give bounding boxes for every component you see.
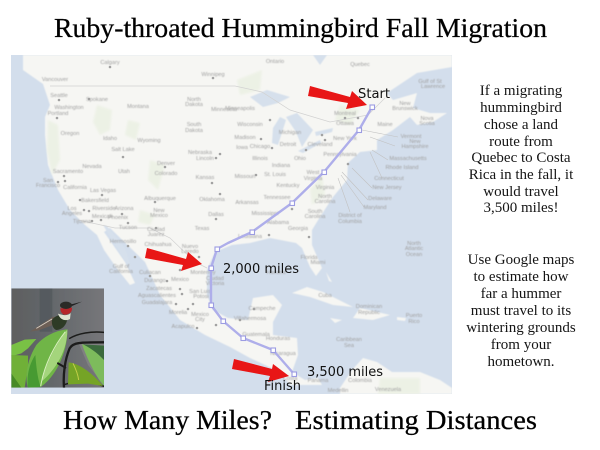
map: route waypoints: [209, 105, 374, 376]
map: place labels: New York: [333, 136, 357, 142]
branches: [58, 332, 104, 388]
arrow: pointing to 2,000 mile point: [145, 248, 202, 271]
footer heading: Estimating Distances: [295, 404, 537, 435]
map: place labels: Gulf of St: [418, 79, 442, 85]
map: place labels: Vancouver: [42, 77, 68, 83]
map: place labels: Ottawa: [336, 121, 355, 127]
map: place labels: Cleveland: [308, 142, 332, 148]
map: place labels: Georgia: [288, 226, 309, 232]
map: place labels: Miami: [311, 260, 325, 266]
map: place labels: Angeles: [62, 211, 82, 217]
map: place labels: Columbia: [338, 219, 363, 225]
map: place labels: Indiana: [272, 163, 291, 169]
map: place labels: Montana: [127, 104, 150, 110]
arrow: pointing to Finish: [232, 359, 289, 382]
map: place labels: Dallas: [208, 212, 224, 218]
map: place labels: Chihuahua: [144, 242, 172, 248]
map: place labels: District of: [338, 213, 362, 219]
map: place labels: Dakota: [185, 102, 204, 108]
map: place labels: Carolina: [315, 199, 336, 205]
text block: Google maps activity: to estimate how: [474, 269, 569, 285]
photo: ruby-throated hummingbird on leaves: [11, 288, 104, 388]
map: place labels: Spokane: [86, 97, 108, 103]
map: borders: [50, 86, 385, 268]
map: place labels: Utah: [118, 169, 130, 175]
map: place labels: Colombia: [348, 378, 373, 384]
map: place labels: Detroit: [280, 142, 297, 148]
map: place labels: Kansas: [196, 175, 215, 181]
map: place labels: Virginia: [304, 176, 323, 182]
map: place labels: Winnipeg: [201, 72, 225, 78]
text block: Google maps activity: must travel to its: [471, 303, 571, 319]
map: place labels: North: [187, 97, 201, 103]
text block: Google maps activity: [466, 252, 576, 370]
map: place labels: Aguascalientes: [138, 293, 176, 299]
map: place labels: Nicaragua: [270, 351, 297, 357]
map: place labels: Oklahoma: [199, 197, 226, 203]
map: place labels: St. Louis: [264, 172, 286, 178]
label: 2,000 miles: 2,000 miles: [223, 262, 299, 277]
map: place labels: Massachusetts: [389, 156, 427, 162]
label: Finish: Finish: [264, 379, 301, 394]
map: place labels: Los: [67, 206, 77, 212]
map: place labels: Nebraska: [188, 150, 213, 156]
map: place labels: Nevada: [82, 164, 103, 170]
map: place labels: Mexicali: [92, 214, 112, 220]
map: place labels: Tennessee: [263, 195, 291, 201]
map: place labels: Chicago: [250, 144, 270, 150]
map: place labels: Mexico: [171, 277, 189, 283]
map: place labels: Albuquerque: [144, 196, 176, 202]
map: place labels: New Jersey: [372, 185, 402, 191]
text block: land route fact: Rica in the fall, it: [469, 167, 574, 183]
map: place labels: Campeche: [248, 306, 276, 312]
map: place labels: Illinois: [252, 156, 268, 162]
map: place labels: Portland: [48, 111, 68, 117]
map: place labels: Tucson: [119, 225, 137, 231]
map: place labels: Acapulco: [171, 324, 195, 330]
map: place labels: Mississippi: [251, 211, 279, 217]
map: place labels: Rico: [408, 319, 420, 325]
map: place labels: Colorado: [155, 171, 177, 177]
map: place labels: Arkansas: [235, 200, 259, 206]
map: place labels: Arizona: [115, 206, 134, 212]
text block: land route fact: [469, 83, 574, 216]
map: callout lines for northeast states: [338, 130, 398, 212]
map: place labels: Las Vegas: [90, 188, 116, 194]
map: place labels: Francisco: [36, 183, 60, 189]
map: place labels: Laredo: [181, 249, 199, 255]
panel: route map: [11, 55, 452, 394]
right leaf: [82, 344, 104, 386]
map: place labels: Gulf of: [113, 264, 130, 270]
left leaves: [11, 339, 36, 388]
map: place labels: Louisiana: [238, 234, 263, 240]
map: place labels: Venezuela: [375, 387, 402, 393]
map: place labels: Ontario: [266, 59, 284, 65]
map: place labels: Nova: [420, 116, 434, 122]
map: place labels: Wyoming: [137, 138, 161, 144]
map: place labels: Denver: [157, 161, 175, 167]
map: migration route line: [211, 107, 372, 374]
label: Start: Start: [358, 87, 390, 102]
map: place labels: Caribbean: [336, 337, 362, 343]
map: place labels: Morelia: [169, 310, 188, 316]
map: place labels: Sea: [344, 343, 355, 349]
map: place labels: Juarez: [148, 232, 165, 238]
map: place labels: Minnesota: [211, 107, 238, 113]
map: place labels: Puerto: [406, 313, 422, 319]
map: place labels: Seattle: [50, 93, 68, 99]
map: place labels: Delaware: [368, 196, 392, 202]
map: place labels: [36, 59, 445, 394]
map: place labels: Republic: [358, 310, 380, 316]
map: place labels: Panama: [308, 378, 329, 384]
map: place labels: Hermosillo: [110, 239, 136, 245]
map: place labels: Carolina: [305, 214, 326, 220]
map: place labels: Dakota: [185, 128, 204, 134]
map: place labels: Maine: [377, 122, 393, 128]
map: place labels: Florida: [300, 255, 318, 261]
map: place labels: Minneapolis: [225, 106, 255, 112]
map: place labels: Tijuana: [73, 219, 92, 225]
map: place labels: Costa: [283, 376, 298, 382]
map: place labels: Medellin: [328, 388, 348, 394]
map: ocean background: [11, 55, 452, 394]
map: place labels: Brunswick: [392, 106, 418, 112]
map: place labels: Culiacan: [139, 270, 161, 276]
map: place labels: Oregon: [61, 131, 79, 137]
map: place labels: West: [307, 170, 320, 176]
map: vegetation shading: [47, 70, 420, 394]
map: place labels: Phoenix: [108, 215, 128, 221]
map: place labels: Hampshire: [401, 144, 429, 150]
map: place labels: Idaho: [103, 136, 117, 142]
map: place labels: Vermont: [401, 134, 422, 140]
map: place labels: Lawrence: [421, 84, 445, 90]
map: place labels: Ocean: [406, 252, 422, 258]
map: place labels: Madison: [234, 135, 256, 141]
map: place labels: Riverside: [92, 206, 116, 212]
map: place labels: Honduras: [266, 336, 290, 342]
map: place labels: Nuevo: [182, 244, 198, 250]
map: place labels: Connecticut: [374, 176, 404, 182]
map: place labels: City: [195, 317, 205, 323]
text block: land route fact: Quebec to Costa: [471, 150, 571, 166]
arrow: pointing to Start: [308, 86, 367, 109]
large central leaf: [26, 329, 67, 388]
map: place labels: Texas: [195, 226, 210, 232]
map: place labels: Michigan: [279, 130, 301, 136]
text block: Google maps activity: from your: [491, 337, 551, 353]
map: place labels: Monterrey: [190, 270, 216, 276]
map: place labels: Washington: [54, 105, 84, 111]
map: place labels: Kentucky: [276, 183, 300, 189]
map: place labels: Bakersfield: [81, 198, 109, 204]
hummingbird: [30, 302, 82, 332]
map: place labels: Wisconsin: [237, 122, 263, 128]
title: Ruby-throated Hummingbird Fall Migration: [54, 12, 547, 43]
map: place labels: Missouri: [235, 174, 255, 180]
map: place labels: North: [318, 194, 332, 200]
map: place labels: Virginia: [316, 185, 335, 191]
map: place labels: Zacatecas: [146, 286, 172, 292]
map: place labels: Guadalajara: [142, 300, 173, 306]
footer heading: [63, 404, 537, 435]
text block: land route fact: 3,500 miles!: [484, 200, 558, 216]
text block: Google maps activity: wintering grounds: [466, 320, 576, 336]
map: place labels: Ohio: [294, 156, 306, 162]
map: city dots: [56, 66, 359, 329]
map: place labels: San Luis: [189, 289, 211, 295]
map: place labels: Ciudad: [147, 227, 165, 233]
bottom leaf: [68, 362, 103, 386]
text block: land route fact: route from: [489, 134, 553, 150]
map: place labels: Cuba: [318, 293, 333, 299]
text block: Google maps activity: far a hummer: [481, 286, 561, 302]
map: place labels: South: [308, 209, 322, 215]
map: place labels: Ciudad: [206, 276, 224, 282]
map: place labels: Iowa: [236, 145, 249, 151]
map: land masses: [23, 55, 452, 394]
map: place labels: South: [187, 122, 201, 128]
text block: Google maps activity: Use Google maps: [468, 252, 574, 268]
map: place labels: Maryland: [363, 205, 387, 211]
map: place labels: Sacramento: [53, 169, 83, 175]
map: place labels: New: [399, 101, 412, 107]
photo background: [11, 288, 104, 388]
map: place labels: Salt Lake: [111, 147, 135, 153]
map: place labels: Rhode Island: [386, 165, 418, 171]
map: place labels: Quebec: [350, 62, 370, 68]
map: place labels: Villahermosa: [234, 316, 267, 322]
map: place labels: Montreal: [334, 111, 356, 117]
map: place labels: Potosi: [193, 294, 209, 300]
map: place labels: Alabama: [267, 220, 290, 226]
label: 3,500 miles: 3,500 miles: [307, 365, 383, 380]
map: place labels: Calgary: [100, 60, 120, 66]
map: great lakes and inland water: [104, 55, 333, 230]
map: place labels: North: [407, 241, 421, 247]
map: place labels: Durango: [144, 278, 166, 284]
map: place labels: Havana: [266, 270, 287, 276]
map: place labels: Mexico: [150, 213, 168, 219]
footer heading: How Many Miles?: [63, 404, 272, 435]
map: place labels: Dominican: [356, 304, 382, 310]
map: place labels: San: [43, 178, 53, 184]
map: place labels: Mexico: [191, 312, 209, 318]
map: place labels: Lincoln: [196, 156, 214, 162]
map: place labels: Atlantic: [405, 246, 423, 252]
map: place labels: California: [109, 269, 134, 275]
text block: land route fact: chose a land: [484, 117, 559, 133]
map: place labels: New: [409, 139, 422, 145]
map: place labels: Guatemala: [242, 332, 271, 338]
map: place labels: Scotia: [419, 121, 436, 127]
text block: land route fact: If a migrating: [480, 83, 563, 99]
map: place labels: California: [63, 185, 88, 191]
text block: land route fact: hummingbird: [480, 100, 562, 116]
text block: land route fact: would travel: [483, 184, 559, 200]
text block: Google maps activity: hometown.: [487, 354, 555, 370]
map: place labels: New: [153, 208, 166, 214]
map: place labels: Victoria: [206, 281, 225, 287]
map: place labels: Pennsylvania: [323, 152, 358, 158]
